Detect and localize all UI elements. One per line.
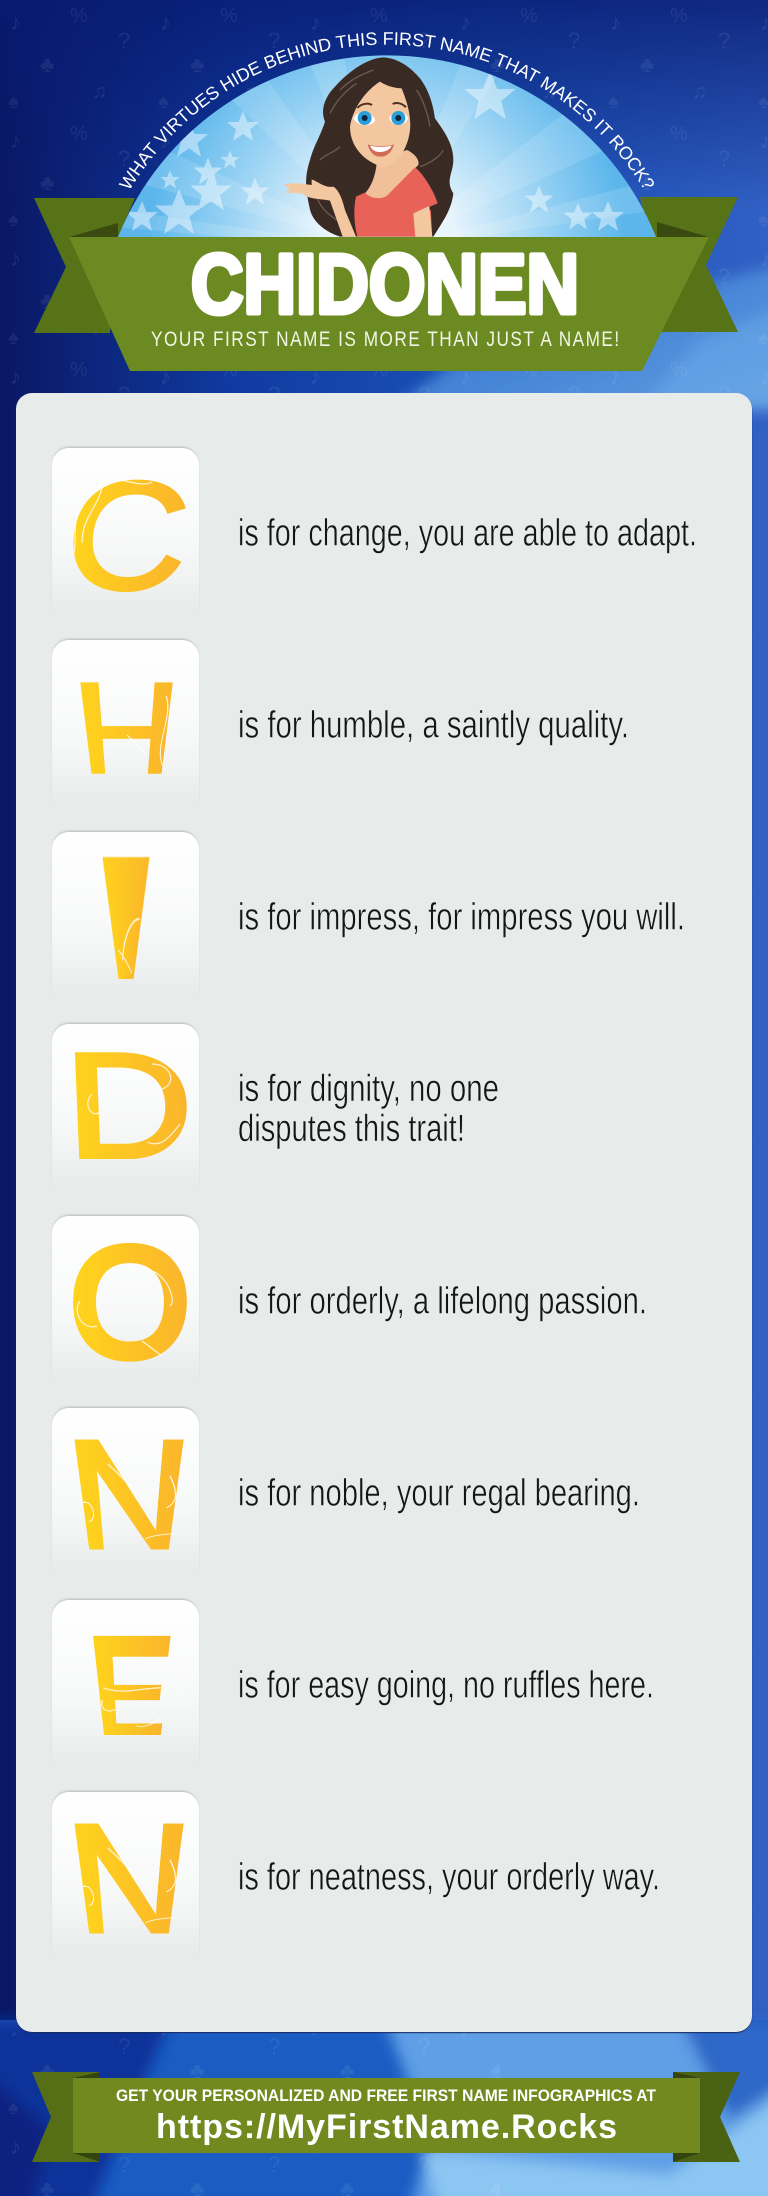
back ribbon right tail [640, 197, 738, 332]
arched tagline: WHAT VIRTUES HIDE BEHIND THIS FIRST NAME THAT MAKES IT ROCK? [118, 32, 654, 188]
dark ribbon folds [69, 222, 709, 237]
back ribbon left tail [34, 198, 135, 333]
panel: letter meanings [16, 393, 752, 2032]
tile: letter H: H [50, 507, 204, 966]
hair highlights [317, 70, 443, 220]
front banner [69, 237, 709, 371]
footer ribbon [32, 2072, 740, 2162]
eyes [353, 103, 408, 125]
tile: letter E: E [58, 1173, 203, 2196]
banner subtitle: YOUR FIRST NAME IS MORE THAN JUST A NAME! [151, 329, 619, 351]
tile: letter C: C [58, 451, 197, 622]
woman illustration [284, 57, 453, 237]
tile: letter O: O [70, 1214, 190, 1389]
tile: letter N: N [40, 1047, 218, 1958]
text: N: is for noble, your regal bearing. [238, 1473, 640, 1515]
right arm [413, 206, 432, 237]
mouth [368, 144, 394, 157]
shirt [354, 167, 438, 237]
footer call to action: GET YOUR PERSONALIZED AND FREE FIRST NAME INFOGRAPHICS AT [116, 2086, 657, 2105]
footer ribbon front [73, 2078, 700, 2153]
face [350, 82, 410, 167]
panel: letter meanings: I [11, 136, 240, 1758]
illustration dome with stars [118, 55, 656, 237]
tile: letter N second: N [40, 1335, 218, 2196]
text: H: is for humble, a saintly quality. [238, 705, 629, 747]
tile: letter D: D [62, 1022, 196, 1189]
tile: letter I [52, 832, 199, 1000]
name title: CHIDONEN [191, 237, 579, 331]
text: D: is for dignity, no one [238, 1068, 499, 1110]
footer ribbon folds [73, 2072, 700, 2162]
neck [365, 150, 419, 199]
text: D [238, 1068, 499, 1150]
text: O: is for orderly, a lifelong passion. [238, 1281, 647, 1323]
text: D: disputes this trait! [238, 1108, 465, 1150]
hair [306, 57, 453, 237]
left arm and hand [284, 179, 356, 237]
footer ribbon right tail [673, 2072, 740, 2162]
tile: letter E [52, 1600, 199, 1768]
letter descriptions [238, 513, 697, 1899]
footer url: https://MyFirstName.Rocks [156, 2108, 617, 2146]
footer ribbon left tail [32, 2072, 100, 2162]
